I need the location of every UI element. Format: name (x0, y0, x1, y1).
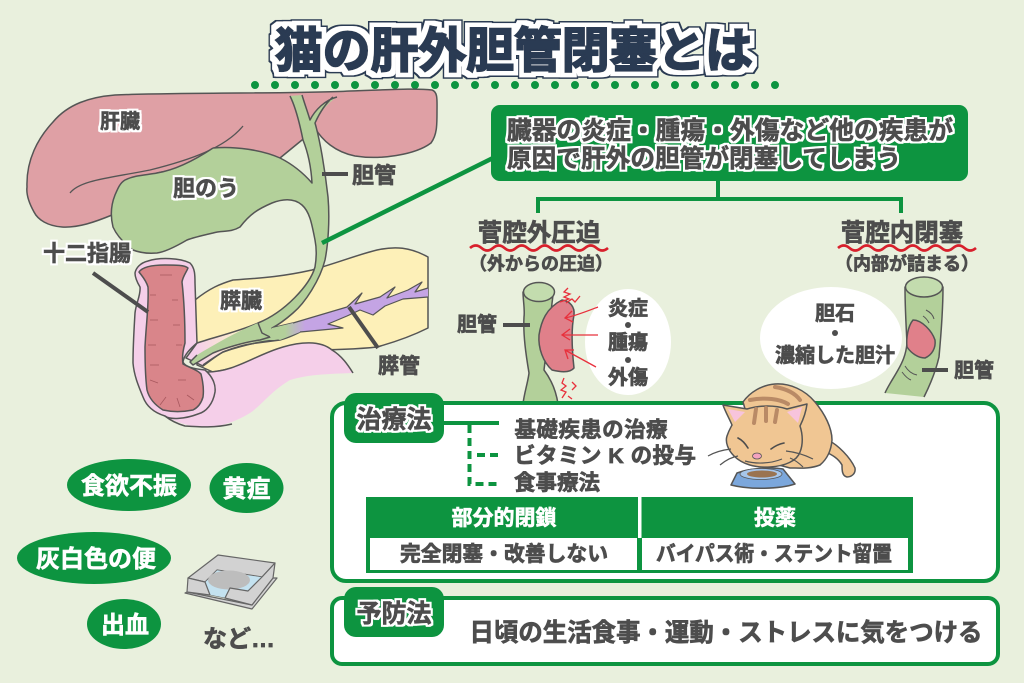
dot (625, 357, 631, 363)
heading: 菅腔内閉塞 (841, 219, 963, 247)
panel frame (332, 403, 998, 581)
illustration: bile duct tube (523, 292, 558, 404)
pancreatic duct outline (293, 282, 428, 332)
tray front-right wall (225, 563, 275, 605)
cat head (723, 404, 807, 467)
cat back stripes (750, 387, 800, 404)
cat whiskers and paws (708, 449, 813, 467)
treatment item 1: 基礎疾患の治療 (514, 418, 668, 442)
icon: litter tray (185, 555, 277, 609)
red wavy underline (838, 246, 976, 250)
cause: concentrated bile: 濃縮した胆汁 (775, 344, 895, 367)
cat tail (826, 440, 855, 477)
callout (491, 105, 968, 181)
label: 灰白色の便 (36, 546, 156, 573)
symptom: appetite loss (67, 459, 191, 511)
tray back walls (188, 555, 275, 582)
left result cell (370, 538, 637, 570)
tab label: 予防法 (356, 600, 432, 628)
tab (344, 587, 444, 637)
cause: gallstone: 胆石 (815, 303, 855, 325)
label: etc: など… (203, 626, 275, 653)
dot (832, 330, 838, 336)
red pain squiggles (560, 288, 580, 399)
duodenum folds (148, 275, 194, 407)
dashed branches (470, 425, 499, 484)
anatomy diagram (27, 89, 437, 427)
organ: duodenum lumen (139, 265, 203, 412)
label: bile duct: 胆管 (954, 359, 994, 382)
organ: duodenum wall (133, 259, 215, 418)
cell: complete obstruction: 完全閉塞・改善しない (400, 543, 608, 566)
cause: tumor: 腫瘍 (608, 331, 648, 354)
connector: duct to callout (322, 157, 495, 243)
label: pancreatic duct: 膵管 (378, 354, 420, 378)
right result cell (642, 538, 908, 570)
prevention text: 日頃の生活食事・運動・ストレスに気をつける (470, 619, 982, 647)
treatment table (366, 497, 913, 573)
table background (366, 497, 913, 573)
dot (625, 322, 631, 328)
cat body (743, 384, 832, 468)
subheading: （内部が詰まる） (835, 253, 979, 274)
tray floor (205, 570, 262, 598)
pink tissue outline (165, 343, 353, 427)
label: bile duct: 胆管 (457, 313, 497, 336)
panel: extraluminal compression (457, 219, 671, 404)
subheading: （外からの圧迫） (469, 254, 613, 274)
panel: intraluminal obstruction (760, 219, 994, 397)
cause: trauma: 外傷 (608, 366, 648, 389)
duct wall marks (902, 310, 934, 380)
cat nose (752, 453, 762, 459)
cause: inflammation: 炎症 (608, 297, 648, 320)
heading: 菅腔外圧迫 (478, 219, 600, 247)
label: duodenum: 十二指腸 (43, 241, 131, 266)
gallbladder and duct outline (111, 95, 337, 365)
bowl inner (740, 468, 782, 480)
illustration: cat eating (708, 384, 855, 488)
leader: bile duct (322, 172, 348, 176)
tab (344, 393, 444, 443)
pale duct wall entering duodenum (186, 323, 275, 366)
bubble: causes (760, 287, 902, 389)
panel: prevention (332, 587, 998, 664)
illustration: bile duct tube (885, 287, 943, 397)
callout text line 2: 原因で肝外の胆管が閉塞してしまう (507, 144, 901, 173)
illustration: blockage (907, 320, 935, 358)
cat ears inner (728, 407, 802, 423)
title: 猫の肝外胆管閉塞とは (275, 25, 753, 78)
red pressure arrows (562, 307, 598, 367)
liver fold line (70, 126, 243, 193)
cat face (738, 438, 784, 449)
header divider (638, 497, 642, 538)
label: 食欲不振 (81, 473, 177, 500)
callout text line 1: 臓器の炎症・腫瘍・外傷など他の疾患が (507, 116, 953, 145)
tube opening (524, 282, 554, 302)
tray base (185, 578, 277, 609)
treatment item 3: 食事療法 (514, 471, 600, 495)
organ: gallbladder and bile duct (111, 95, 337, 365)
label: liver: 肝臓 (100, 110, 140, 133)
leader: bile duct (503, 323, 530, 327)
label: bile duct: 胆管 (352, 163, 396, 188)
cat head stripes (754, 408, 777, 423)
label: 黄疸 (222, 476, 270, 503)
symptom: pale stool (17, 532, 171, 584)
tab label: 治療法 (356, 406, 432, 434)
cell: bypass and stent: バイパス術・ステント留置 (656, 542, 892, 566)
food bowl (731, 468, 795, 488)
label: gallbladder: 胆のう (173, 176, 239, 201)
panel: treatment (332, 384, 998, 581)
tube opening (906, 277, 942, 297)
leader: pancreatic duct (349, 307, 378, 348)
stool stain (208, 570, 250, 590)
symptom: jaundice (210, 463, 284, 513)
illustration: compressing mass (539, 300, 574, 372)
label: 出血 (101, 612, 149, 639)
treatment item 2: ビタミン K の投与 (514, 444, 696, 468)
bracket connector (538, 181, 901, 213)
symptoms (17, 459, 284, 653)
organ: pancreas (195, 248, 428, 372)
symptom: bleeding (87, 599, 161, 649)
tray front-left wall (187, 578, 210, 595)
treatment tree lines (444, 421, 499, 425)
pancreatic duct (270, 282, 428, 340)
organ: liver (27, 89, 437, 227)
bubble: causes (585, 289, 671, 395)
header: medication: 投薬 (754, 507, 796, 530)
leader: bile duct (922, 368, 948, 372)
red wavy underline (470, 246, 608, 250)
organ: lower pink tissue (165, 343, 353, 427)
title dotted rule (255, 81, 780, 89)
leader: duodenum (93, 273, 148, 312)
cat food (747, 470, 777, 478)
panel frame (332, 598, 998, 664)
header: partial obstruction: 部分的閉鎖 (452, 507, 556, 530)
label: pancreas: 膵臓 (220, 289, 262, 313)
